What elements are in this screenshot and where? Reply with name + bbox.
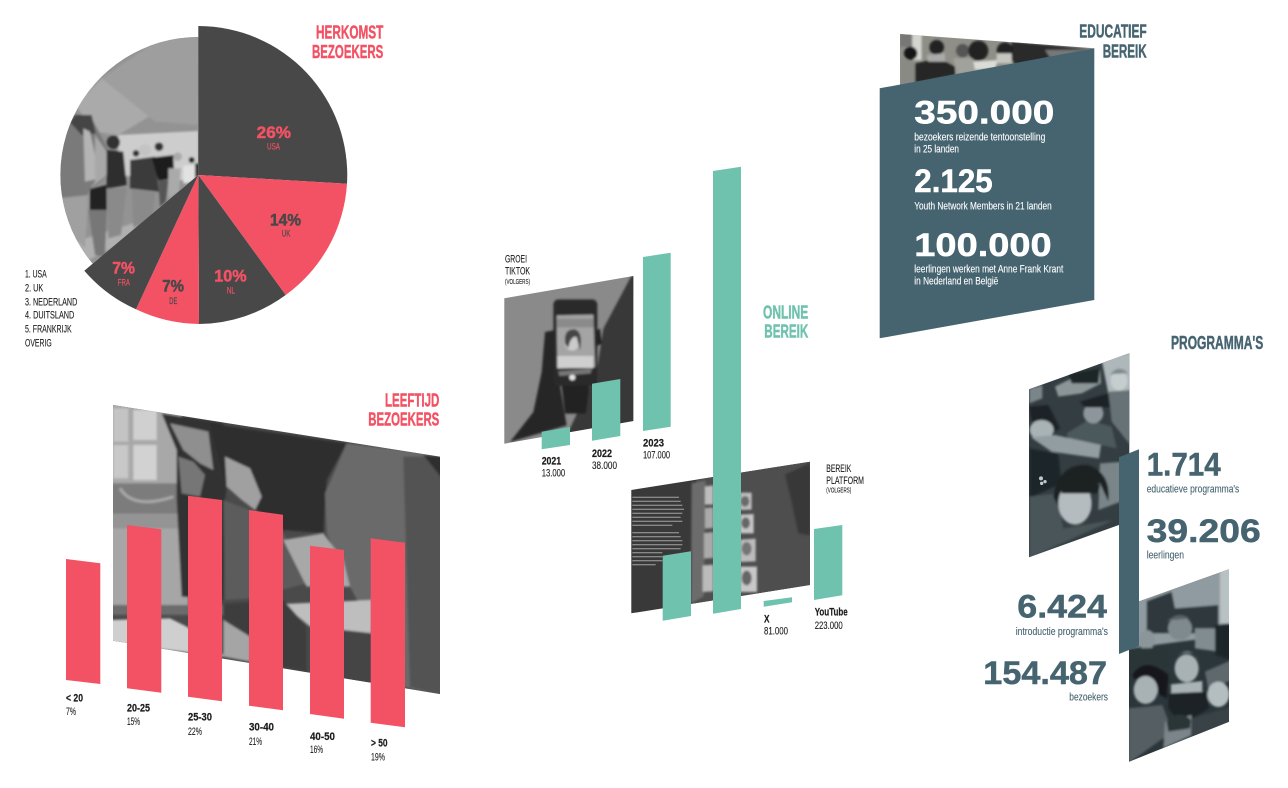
stat: 6.424 bbox=[1016, 589, 1108, 638]
stat: 6.424: 6.424 bbox=[1017, 589, 1107, 625]
platform photo: wall with portraits bbox=[631, 462, 810, 614]
bar: > 50: 19% bbox=[371, 752, 385, 764]
heading: leeftijd bezoekers: BEZOEKERS bbox=[368, 409, 439, 429]
bar: 40-50: 40-50 bbox=[310, 731, 335, 743]
stat: 154.487: bezoekers bbox=[1069, 692, 1108, 704]
stat: 100.000 bbox=[914, 227, 1063, 288]
pie slice: DE 7%: DE bbox=[169, 296, 177, 307]
bar: YouTube bbox=[814, 525, 848, 632]
heading: herkomst bezoekers bbox=[312, 23, 383, 62]
stat: 2.125: Youth Network Members in 21 landen bbox=[914, 200, 1052, 212]
pie slice: NL 10% bbox=[198, 175, 286, 324]
bar: 40-50: 16% bbox=[310, 744, 323, 756]
heading: leeftijd bezoekers: LEEFTIJD bbox=[385, 391, 439, 411]
label: groei tiktok: TIKTOK bbox=[505, 265, 530, 277]
stat: 100.000: 100.000 bbox=[914, 227, 1052, 263]
stat: 39.206: 39.206 bbox=[1147, 513, 1261, 549]
pie legend: 4. DUITSLAND bbox=[25, 310, 74, 322]
bar: < 20 bbox=[66, 559, 100, 718]
panel: educatief bereik bbox=[880, 21, 1147, 338]
pie legend: 3. NEDERLAND bbox=[25, 296, 77, 308]
pie legend: OVERIG bbox=[25, 338, 52, 350]
pie slice: UK 14%: 14% bbox=[270, 210, 301, 229]
bar: 40-50 bbox=[310, 546, 344, 756]
pie legend: 5. FRANKRIJK bbox=[25, 323, 72, 335]
bar: 2023: 107.000 bbox=[643, 450, 670, 462]
stat: 154.487 bbox=[983, 655, 1108, 704]
bar: 25-30: 22% bbox=[188, 726, 202, 738]
heading: herkomst bezoekers: HERKOMST bbox=[316, 23, 383, 43]
stat: 1.714: educatieve programma's bbox=[1147, 484, 1240, 496]
pie slice: UK 14% bbox=[198, 175, 347, 295]
bar: platform without label bbox=[663, 551, 691, 621]
stat: 6.424: introductie programma's bbox=[1016, 626, 1108, 638]
bar: X: X bbox=[764, 614, 770, 626]
panel: herkomst bezoekers bbox=[25, 23, 383, 350]
slate panel bbox=[880, 48, 1094, 338]
stat: 1.714 bbox=[1147, 446, 1240, 496]
bar: < 20: < 20 bbox=[66, 693, 83, 705]
age photo: two women reading bbox=[110, 400, 445, 700]
bar: 2023 bbox=[643, 253, 671, 462]
label: groei tiktok: (VOLGERS) bbox=[505, 279, 530, 286]
bar: > 50: > 50 bbox=[371, 738, 388, 750]
label: bereik platform bbox=[826, 463, 864, 495]
heading: leeftijd bezoekers bbox=[368, 391, 439, 429]
bar: 30-40 bbox=[249, 510, 283, 748]
pie slice: NL 10%: NL bbox=[227, 285, 235, 296]
bar: 20-25 bbox=[127, 525, 161, 728]
bar: 20-25: 20-25 bbox=[127, 703, 150, 715]
pie slice: NL 10%: 10% bbox=[214, 267, 247, 286]
pie photo: queue of visitors bbox=[60, 37, 198, 264]
stat: 100.000: leerlingen werken met Anne Frank Krant bbox=[914, 264, 1063, 276]
stat: 2.125 bbox=[914, 163, 1052, 212]
bar: X bbox=[764, 597, 792, 638]
pie slice: DE 7% bbox=[136, 175, 199, 324]
pie legend: 2. UK bbox=[25, 283, 44, 295]
bar: 2022: 38.000 bbox=[592, 460, 617, 472]
pie slice: FRA 7%: 7% bbox=[112, 259, 135, 278]
stat: 350.000: in 25 landen bbox=[914, 144, 959, 156]
stat: 350.000: bezoekers reizende tentoonstelling bbox=[914, 132, 1045, 144]
stat: 39.206 bbox=[1147, 513, 1261, 561]
heading: educatief bereik bbox=[1079, 21, 1147, 62]
stat: 1.714: 1.714 bbox=[1147, 446, 1221, 482]
pie legend bbox=[25, 268, 77, 350]
bar: 2021: 13.000 bbox=[542, 468, 565, 480]
stat: 2.125: 2.125 bbox=[914, 163, 993, 199]
tiktok photo: phone showing Anne Frank bbox=[504, 276, 634, 444]
bar: YouTube: 223.000 bbox=[815, 620, 843, 632]
bar: X: 81.000 bbox=[764, 626, 788, 638]
panel: programma's bbox=[983, 333, 1263, 765]
educatief photo: group of students bbox=[900, 34, 1094, 84]
photo: group of children bbox=[1129, 569, 1229, 762]
stat: 154.487: 154.487 bbox=[983, 655, 1107, 691]
photo: children at school desks bbox=[1029, 353, 1130, 558]
label: bereik platform: (VOLGERS) bbox=[826, 488, 851, 495]
heading: online bereik bbox=[763, 303, 808, 342]
bar: 2021 bbox=[542, 427, 570, 480]
bar: 25-30: 25-30 bbox=[188, 712, 212, 724]
bar: 25-30 bbox=[188, 496, 222, 738]
bar: 2022: 2022 bbox=[592, 448, 612, 460]
stat: 350.000 bbox=[914, 94, 1054, 156]
pie slice: DE 7%: 7% bbox=[162, 277, 184, 296]
slate vertical bar bbox=[1119, 449, 1139, 654]
pie slice: FRA 7% bbox=[84, 175, 198, 309]
pie slice: USA 26%: 26% bbox=[257, 123, 291, 142]
bar: 30-40: 30-40 bbox=[249, 722, 274, 734]
label: groei tiktok: GROEI bbox=[505, 254, 527, 266]
bar: 20-25: 15% bbox=[127, 716, 140, 728]
heading: herkomst bezoekers: BEZOEKERS bbox=[312, 42, 383, 62]
panel: leeftijd bezoekers bbox=[66, 391, 445, 764]
bar: 2021: 2021 bbox=[542, 456, 561, 468]
stat: 350.000: 350.000 bbox=[914, 94, 1054, 130]
bar: 2023: 2023 bbox=[643, 438, 664, 450]
pie slice: FRA 7%: FRA bbox=[118, 278, 130, 289]
pie slice: USA 26% bbox=[198, 26, 347, 184]
pie legend: 1. USA bbox=[25, 268, 47, 280]
heading: online bereik: ONLINE bbox=[763, 303, 808, 323]
label: bereik platform: PLATFORM bbox=[826, 475, 864, 487]
bar: < 20: 7% bbox=[66, 706, 76, 718]
stat: 100.000: in Nederland en België bbox=[914, 276, 998, 288]
heading: educatief bereik: BEREIK bbox=[1103, 42, 1147, 62]
pie slice: USA 26%: USA bbox=[267, 142, 280, 153]
bar: tallest platform bbox=[713, 167, 741, 614]
heading: educatief bereik: EDUCATIEF bbox=[1079, 21, 1147, 41]
pie slice: UK 14%: UK bbox=[282, 229, 291, 240]
bar: YouTube: YouTube bbox=[815, 607, 848, 619]
bar: > 50 bbox=[371, 538, 405, 764]
stat: 39.206: leerlingen bbox=[1147, 549, 1184, 561]
label: bereik platform: BEREIK bbox=[826, 463, 852, 475]
bar: 2022 bbox=[592, 379, 620, 472]
label: groei tiktok bbox=[505, 254, 530, 286]
panel: online bereik bbox=[500, 167, 864, 638]
heading: online bereik: BEREIK bbox=[764, 322, 808, 342]
bar: 30-40: 21% bbox=[249, 736, 262, 748]
